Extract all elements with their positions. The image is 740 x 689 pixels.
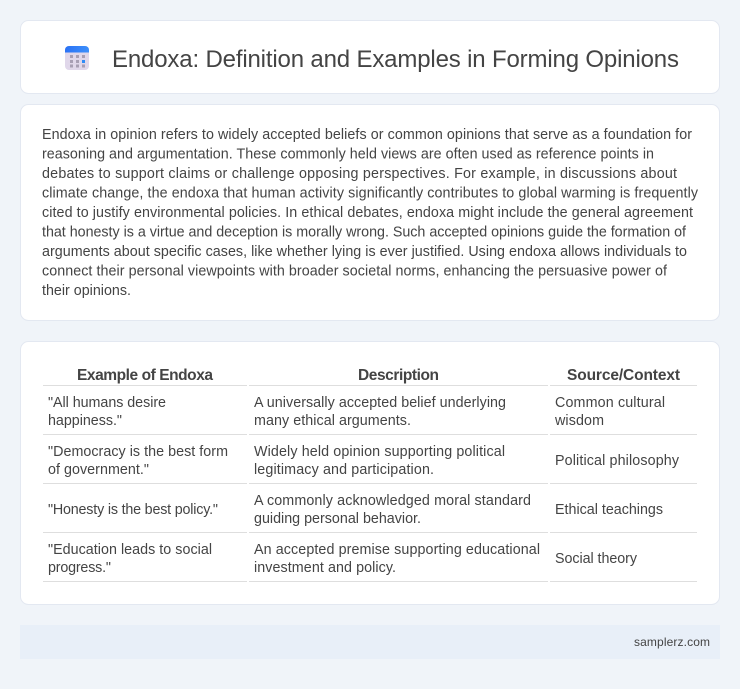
table row 2: Political philosophy <box>555 453 680 469</box>
table row 1 <box>48 395 665 429</box>
table row 3: Ethical teachings <box>555 502 663 518</box>
table row 2: of government." <box>48 462 149 478</box>
paragraph text: cited to justify environmental policies. In ethical debates, endoxa might include the general agreement <box>42 205 693 221</box>
table row 4: progress." <box>48 560 111 576</box>
table row 1: "All humans desire <box>48 395 166 411</box>
table row 3: guiding personal behavior. <box>254 511 421 527</box>
paragraph text: their opinions. <box>42 283 131 299</box>
table row 4: Social theory <box>555 551 638 567</box>
paragraph text: arguments about specific cases, like whether lying is ever justified. Using endoxa allows individuals to <box>42 244 687 260</box>
table row 2 <box>48 444 680 478</box>
table row 4: An accepted premise supporting educational <box>254 542 540 558</box>
paragraph text: Endoxa in opinion refers to widely accepted beliefs or common opinions that serve as a foundation for <box>42 127 692 143</box>
footer text: samplerz.com <box>634 635 710 649</box>
paragraph text: debates to support claims or challenge opposing perspectives. For example, in discussions about <box>42 166 677 182</box>
paragraph text: that honesty is a virtue and deception is morally wrong. Such accepted opinions guide the formation of <box>42 224 686 240</box>
icon: calendar <box>65 46 89 70</box>
table row 1: A universally accepted belief underlying <box>254 395 506 411</box>
table row 1: wisdom <box>554 413 604 429</box>
table row 3: "Honesty is the best policy." <box>48 502 218 518</box>
table row 2: Widely held opinion supporting political <box>254 444 505 460</box>
table header: Description <box>358 367 439 384</box>
table row 3 <box>48 493 663 527</box>
paragraph text: reasoning and argumentation. These commonly held views are often used as reference points in <box>42 146 654 162</box>
footer bar <box>20 625 720 659</box>
panel: description <box>20 104 720 320</box>
table row 2: "Democracy is the best form <box>48 444 228 460</box>
table header <box>77 367 680 384</box>
table header: Example of Endoxa <box>77 367 213 384</box>
table rules <box>43 385 697 582</box>
table row 4: "Education leads to social <box>48 542 212 558</box>
panel: table <box>20 342 720 604</box>
paragraph text <box>42 127 699 299</box>
paragraph text: climate change, the endoxa that human activity significantly contributes to global warming is frequently <box>42 186 699 202</box>
table row 4 <box>48 542 638 576</box>
title: Endoxa: Definition and Examples in Forming Opinions <box>112 46 679 73</box>
table row 1: happiness." <box>48 413 122 429</box>
table row 3: A commonly acknowledged moral standard <box>254 493 531 509</box>
table row 1: Common cultural <box>555 395 665 411</box>
table row 1: many ethical arguments. <box>254 413 411 429</box>
table header: Source/Context <box>567 367 680 384</box>
paragraph text: connect their personal viewpoints with broader societal norms, enhancing the persuasive power of <box>42 264 667 280</box>
table row 2: legitimacy and participation. <box>254 462 434 478</box>
table row 4: investment and policy. <box>254 560 396 576</box>
panel: header <box>20 20 720 94</box>
